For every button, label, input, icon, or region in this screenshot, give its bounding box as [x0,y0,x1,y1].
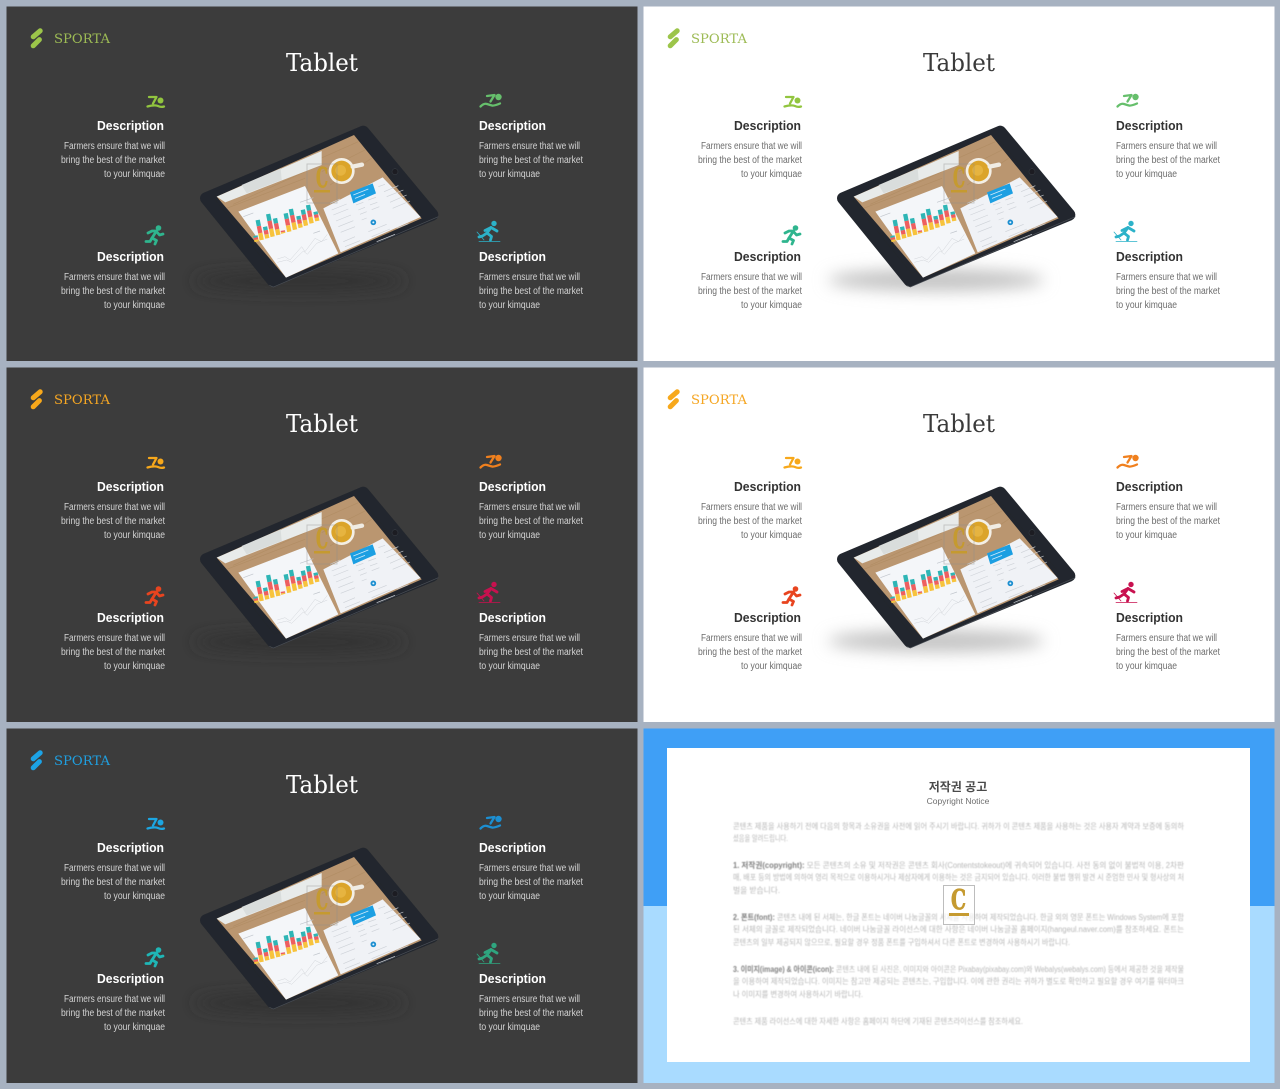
text block: top right: Description [479,480,546,494]
text block: top left: bring the best of the market [61,877,165,888]
text block: bottom left: to your kimquae [104,300,165,311]
logo mark [33,31,40,46]
text block: bottom left [698,611,802,672]
text block: top left: bring the best of the market [61,155,165,166]
notice subheading: Copyright Notice [927,796,990,806]
text block: bottom right: bring the best of the market [479,286,583,297]
text block: bottom left [61,250,165,311]
watermark [944,524,974,564]
text block: top right: bring the best of the market [479,516,583,527]
text block: bottom right: bring the best of the market [1116,647,1220,658]
icon: skier [477,943,500,964]
text block: bottom right: Farmers ensure that we will [1116,633,1217,644]
watermark [944,163,974,203]
text block: bottom right: Description [1116,611,1183,625]
notice heading: 저작권 공고 [929,779,987,794]
text block: bottom right: bring the best of the market [1116,286,1220,297]
watermark [307,885,337,925]
text block: bottom right: Description [479,611,546,625]
logo wordmark: SPORTA [54,754,111,769]
text block: bottom right: Description [479,972,546,986]
text block: bottom left: to your kimquae [104,661,165,672]
watermark [307,163,337,203]
text block: bottom right: bring the best of the market [479,647,583,658]
notice body text: 된 서체의 글꼴로 제작되었습니다. 네이버 나눔글꼴 라이선스에 대한 사항은 네이버 나눔글꼴 홈페이지(hangeul.naver.com)를 참조하세요. 폰트는 [733,924,1184,934]
text block: bottom right [479,250,583,311]
logo mark [33,392,40,407]
text block: top right: Farmers ensure that we will [1116,502,1217,513]
title: Tablet [286,49,358,77]
text block: bottom right: Description [479,250,546,264]
text block: top left [698,119,802,180]
text block: top left: Description [734,119,801,133]
title: Tablet [923,49,995,77]
logo mark [33,753,40,768]
text block: top right: Farmers ensure that we will [479,863,580,874]
text block: bottom right: Farmers ensure that we will [479,633,580,644]
notice body text: 콘텐츠의 일부 제공되지 않으므로, 필요할 경우 정품 폰트를 구입하셔서 다른 폰트로 변경하여 사용하시기 바랍니다. [733,937,1070,947]
icon: swimmer [148,97,164,107]
text block: top left: Description [97,119,164,133]
icon: swimmer waves [1118,455,1139,468]
text block: bottom right [479,972,583,1033]
logo wordmark: SPORTA [54,32,111,47]
text block: bottom right: Description [1116,250,1183,264]
text block: top left: Farmers ensure that we will [64,141,165,152]
text block: top left: Farmers ensure that we will [701,502,802,513]
text block: top right: Description [1116,119,1183,133]
icon: runner [783,586,800,605]
text block: top left: to your kimquae [104,891,165,902]
text block: bottom left: bring the best of the market [61,1008,165,1019]
text block: bottom left: Description [97,972,164,986]
text block: bottom right: bring the best of the market [479,1008,583,1019]
text block: bottom right: Farmers ensure that we will [479,272,580,283]
watermark: C [953,524,965,555]
text block: bottom left: Farmers ensure that we will [64,272,165,283]
tablet shadow [828,630,1044,652]
text block: bottom left: Description [734,250,801,264]
icon: swimmer [148,458,164,468]
logo mark [670,31,677,46]
text block: top right [1116,480,1220,541]
panel: dark green slide [6,6,638,361]
notice body text: 3. 이미지(image) & 아이콘(icon): 콘텐츠 내에 된 사진은, 이미지와 아이콘은 Pixabay(pixabay.com)와 Webalys(webalys.com) 등에서 제공한 것을 제작물 [733,964,1184,974]
text block: bottom left: bring the best of the market [698,286,802,297]
text block: bottom right: Farmers ensure that we will [479,994,580,1005]
icon: swimmer [784,458,801,468]
watermark: C [951,885,966,916]
text block: bottom left: bring the best of the market [698,647,802,658]
text block: top right: to your kimquae [1116,169,1177,180]
text block: top right: Description [479,119,546,133]
icon: swimmer [784,97,801,107]
text block: top right [1116,119,1220,180]
logo wordmark: SPORTA [54,393,111,408]
watermark: C [316,885,328,916]
text block: top left: to your kimquae [104,169,165,180]
text block: top left: Farmers ensure that we will [701,141,802,152]
notice body text: 매, 배포 등의 방법에 의하여 영리 목적으로 이용하시거나 제삼자에게 이용하는 것은 금지되어 있습니다. 이러한 불법 행위 발견 시 준엄한 민사 및 형사상의 처 [733,872,1184,882]
text block: bottom right: to your kimquae [479,300,540,311]
watermark: C [316,163,328,194]
title: Tablet [923,410,995,438]
text block: top left: bring the best of the market [698,155,802,166]
text block: bottom left: Description [734,611,801,625]
text block: bottom right: to your kimquae [479,1022,540,1033]
tablet mockup [206,854,438,1009]
tablet mockup [206,132,438,287]
text block: top right [479,480,583,541]
panel: dark orange slide [6,368,638,722]
text block: bottom right: to your kimquae [479,661,540,672]
text block: bottom left: to your kimquae [741,661,802,672]
text block: top right: Description [479,841,546,855]
text block: top right: to your kimquae [479,530,540,541]
text block: bottom left [61,972,165,1033]
text block: top right: bring the best of the market [479,877,583,888]
panel: light orange slide [644,368,1274,722]
text block: bottom left: Description [97,250,164,264]
text block: top right [479,119,583,180]
notice body text: 1. 저작권(copyright): 모든 콘텐츠의 소유 및 저작권은 콘텐츠 회사(Contentstokeout)에 귀속되어 있습니다. 사전 동의 없이 불법적 이용, 2차판 [733,860,1185,870]
text block: top left: Description [97,480,164,494]
notice body text: 콘텐츠 제품을 사용하기 전에 다음의 항목과 소유권을 사전에 읽어 주시기 바랍니다. 귀하가 이 콘텐츠 제품을 사용하는 것은 사용자 계약과 보증에 동의하 [733,821,1185,831]
text block: bottom right: to your kimquae [1116,661,1177,672]
icon: runner [146,225,163,244]
tablet mockup [843,132,1075,287]
text block: bottom left: Farmers ensure that we will [64,633,165,644]
text block: top left: to your kimquae [741,530,802,541]
text block: bottom left: to your kimquae [104,1022,165,1033]
text block: bottom left: Farmers ensure that we will [701,272,802,283]
text block: bottom right [1116,250,1220,311]
text block: bottom left: bring the best of the market [61,286,165,297]
icon: swimmer waves [480,816,502,828]
icon: skier [477,221,500,242]
text block: top left: Description [97,841,164,855]
text block: top left [61,119,165,180]
text block: top right: to your kimquae [479,891,540,902]
logo mark [670,392,677,407]
icon: swimmer [148,819,164,829]
text block: top left: Farmers ensure that we will [64,863,165,874]
tablet mockup [206,493,438,648]
text block: bottom left: Farmers ensure that we will [701,633,802,644]
text block: top left: Farmers ensure that we will [64,502,165,513]
watermark: C [316,524,328,555]
logo wordmark: SPORTA [691,32,748,47]
text block: top left [698,480,802,541]
text block: bottom left: Description [97,611,164,625]
text block: top right: to your kimquae [1116,530,1177,541]
panel: dark blue slide [6,728,638,1083]
text block: bottom right [479,611,583,672]
icon: swimmer waves [480,455,502,468]
watermark [944,885,974,924]
notice body text: 셨음을 알려드립니다. [733,833,788,843]
icon: runner [783,225,800,244]
text block: top left: to your kimquae [104,530,165,541]
text block: top right: Farmers ensure that we will [1116,141,1217,152]
text block: top right [479,841,583,902]
text block: top right: Farmers ensure that we will [479,141,580,152]
title: Tablet [286,771,358,799]
text block: top left: Description [734,480,801,494]
notice body text: 벌을 받습니다. [733,885,780,895]
notice body text: 을 이용하여 제작되었습니다. 이미지는 참고만 제공되는 콘텐츠는, 구입합니다. 이에 관한 권리는 귀하가 별도로 확인하고 필요할 경우 여기를 워터마크 [733,976,1184,986]
text block: top left [61,480,165,541]
title: Tablet [286,410,358,438]
tablet shadow [194,994,404,1012]
icon: skier [1114,582,1137,602]
icon: runner [146,586,163,605]
logo wordmark: SPORTA [691,393,748,408]
text block: top right: bring the best of the market [1116,516,1220,527]
icon: skier [477,582,500,602]
text block: bottom right [1116,611,1220,672]
text block: top right: bring the best of the market [479,155,583,166]
text block: top left [61,841,165,902]
notice body text: 나 이미지를 변경하여 사용하시기 바랍니다. [733,989,863,999]
icon: skier [1114,221,1137,242]
text block: bottom left [698,250,802,311]
notice body text: 콘텐츠 제품 라이선스에 대한 자세한 사항은 홈페이지 하단에 기재된 콘텐츠라이선스를 참조하세요. [733,1016,1023,1026]
text block: top left: to your kimquae [741,169,802,180]
panel: copyright notice [644,728,1274,1083]
text block: bottom left: Farmers ensure that we will [64,994,165,1005]
text block: top left: bring the best of the market [698,516,802,527]
text block: top right: Farmers ensure that we will [479,502,580,513]
text block: top left: bring the best of the market [61,516,165,527]
text block: top right: to your kimquae [479,169,540,180]
text block: bottom right: to your kimquae [1116,300,1177,311]
notice body text [733,821,1185,1026]
watermark: C [953,163,965,194]
tablet mockup [843,493,1075,648]
text block: bottom left [61,611,165,672]
icon: runner [146,947,163,966]
icon: swimmer waves [1118,94,1139,106]
text block: bottom left: bring the best of the market [61,647,165,658]
notice card [667,748,1250,1062]
panel: light green slide [644,6,1274,361]
tablet shadow [194,272,404,290]
watermark [307,524,337,564]
tablet shadow [194,633,404,651]
text block: top right: Description [1116,480,1183,494]
notice body text: 2. 폰트(font): 콘텐츠 내에 된 서체는, 한글 폰트는 네이버 나눔글꼴의 서체를 사용하여 제작되었습니다. 한글 외의 영문 폰트는 Windows System에 포함 [733,912,1185,922]
text block: bottom left: to your kimquae [741,300,802,311]
icon: swimmer waves [480,94,502,106]
tablet shadow [828,269,1044,291]
text block: bottom right: Farmers ensure that we will [1116,272,1217,283]
text block: top right: bring the best of the market [1116,155,1220,166]
